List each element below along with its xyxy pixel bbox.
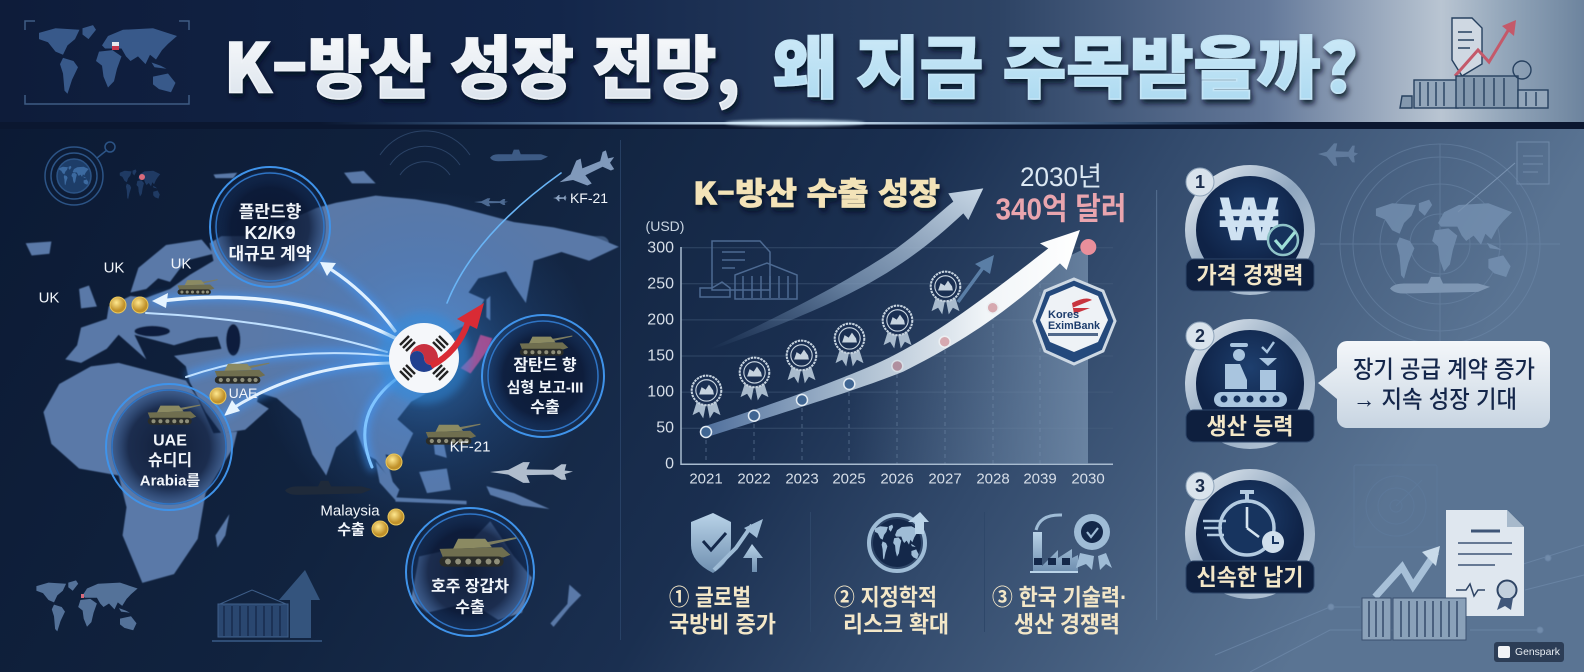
arrow: red growth xyxy=(431,303,484,366)
icon: fighter jet top right xyxy=(554,146,620,195)
arrow to Middle East 2 xyxy=(230,363,391,410)
circle: Australia: 수출 xyxy=(455,598,485,616)
circle: Poland: 플란드향 xyxy=(239,202,302,222)
strength 3: delivery xyxy=(1185,469,1315,599)
arrow to Middle East 1 xyxy=(186,353,389,377)
x axis labels: 2026 xyxy=(880,470,914,488)
data points xyxy=(700,239,1096,438)
y axis labels: 250 xyxy=(647,276,674,292)
panel divider xyxy=(620,140,621,640)
circle: UAE Saudi: UAE xyxy=(153,432,187,450)
circle: Australia: 호주 장갑차 xyxy=(431,578,509,596)
label: KF-21 top: KF-21 xyxy=(570,190,608,206)
circle: UAE Saudi: Arabia를 xyxy=(140,472,200,490)
title: K–방산 성장 전망, xyxy=(224,14,740,112)
icon: small map bottom left xyxy=(36,580,138,631)
panel: growth chart xyxy=(646,162,1126,488)
circle: Poland xyxy=(210,167,330,287)
panel divider xyxy=(1156,190,1157,620)
Genspark mark: Genspark xyxy=(1515,646,1561,658)
icon: globe with arrow xyxy=(869,512,929,571)
icon: won with check: ₩ xyxy=(1220,186,1279,254)
header band xyxy=(0,0,1584,129)
item: Korean technology xyxy=(992,514,1127,637)
map labels: UAE xyxy=(229,385,257,401)
main growth arrow xyxy=(703,230,1080,437)
y axis labels: 150 xyxy=(647,348,674,364)
map labels: KF-21 xyxy=(450,438,490,456)
circle: UAE Saudi xyxy=(106,384,232,510)
callout: long term contracts: → 지속 성장 기대 xyxy=(1353,386,1517,414)
arrowheads xyxy=(152,262,336,416)
circle: Japan side: 심형 보고-III xyxy=(507,380,583,396)
icon: small jet xyxy=(474,198,508,206)
number badge: 1 xyxy=(1195,172,1205,192)
artillery near Philippines xyxy=(426,424,480,445)
icon: factory with seal xyxy=(1030,514,1112,573)
icon: growth arrow and containers xyxy=(1362,546,1466,640)
strength 2: production xyxy=(1185,319,1315,449)
radar arcs xyxy=(380,131,470,175)
icon: shield with arrow xyxy=(691,513,763,573)
flag glow over map xyxy=(254,188,594,528)
icon: tiny jet near label xyxy=(553,195,567,201)
text: ② 지정학적 xyxy=(834,584,937,610)
circle: Japan side: 수출 xyxy=(530,398,560,416)
icon: globe target xyxy=(45,142,115,205)
map labels: UK xyxy=(39,290,59,306)
chart heading: K–방산 수출 성장 xyxy=(693,168,940,214)
arrow to Poland xyxy=(324,265,395,331)
item: global defense spending xyxy=(669,513,776,637)
number badge: 3 xyxy=(1195,476,1205,496)
item divider xyxy=(810,512,811,632)
item: Korean technology: 생산 경쟁력 xyxy=(1014,611,1120,637)
badge: Korea Exim Bank xyxy=(1034,279,1115,364)
number badge: 2 xyxy=(1195,326,1205,346)
text: ① 글로벌 xyxy=(669,584,751,610)
x axis labels: 2039 xyxy=(1023,470,1057,488)
y axis labels xyxy=(647,240,674,472)
icon: contract document xyxy=(1446,510,1524,616)
item: global defense spending: 국방비 증가 xyxy=(669,611,776,637)
map labels: Malaysia xyxy=(320,502,380,520)
x axis labels: 2027 xyxy=(928,470,962,488)
icon: submarine top xyxy=(490,150,548,161)
icon: small map top left xyxy=(120,169,160,199)
arrow to jet xyxy=(447,173,561,303)
label pill: 생산 능력 xyxy=(1206,413,1294,439)
y axis labels: 200 xyxy=(647,312,674,328)
icon: export container with arrow xyxy=(212,570,322,642)
arrow to Europe xyxy=(160,297,395,338)
axis and grid xyxy=(681,247,1113,464)
icon: submarine south xyxy=(285,481,372,495)
small trend arrow xyxy=(958,255,994,302)
map labels: UK xyxy=(171,256,191,272)
circle: UAE Saudi: 슈디디 xyxy=(148,452,192,470)
2030 label: 2030년 xyxy=(1020,162,1102,192)
world map continents xyxy=(26,171,619,627)
y axis labels: 300 xyxy=(647,240,674,256)
medals xyxy=(692,272,960,418)
badge: Korea Exim Bank: EximBank xyxy=(1048,320,1101,332)
arrow glow xyxy=(154,262,395,467)
x axis labels: 2022 xyxy=(737,470,771,488)
callout: long term contracts: 장기 공급 계약 증가 xyxy=(1353,356,1535,384)
circle: Poland: K2/K9 xyxy=(244,223,296,243)
y axis labels: 50 xyxy=(656,420,674,436)
x axis labels xyxy=(689,470,1105,488)
x axis labels: 2023 xyxy=(785,470,819,488)
circle: Japan side xyxy=(482,315,604,437)
badge: Korea Exim Bank: Kores xyxy=(1048,309,1079,321)
callout: long term contracts xyxy=(1318,341,1550,428)
label pill: 가격 경쟁력 xyxy=(1196,262,1304,288)
arrow to Southeast Asia xyxy=(365,380,395,467)
icon: header contract, containers and growth arrow xyxy=(1400,18,1548,108)
icon: faded contract and bank xyxy=(700,241,797,299)
tank near UK xyxy=(178,279,218,295)
circle: Japan side: 잠탄드 향 xyxy=(513,356,577,374)
340 label: 340억 달러 xyxy=(996,192,1126,226)
icon: worker and conveyor xyxy=(1214,342,1287,407)
item divider xyxy=(984,512,985,632)
map labels xyxy=(39,256,490,538)
x axis labels: 2030 xyxy=(1071,470,1105,488)
item: geopolitical risk: 리스크 확대 xyxy=(843,611,949,637)
circle: Australia xyxy=(406,508,534,636)
map labels: UK xyxy=(104,260,124,276)
icon: header world map frame xyxy=(25,21,189,104)
title xyxy=(224,14,1358,112)
title: 왜 지금 주목받을까? xyxy=(773,14,1358,112)
tank above UAE xyxy=(215,363,269,384)
export arrows xyxy=(146,173,561,467)
icon: Korea flag xyxy=(378,312,470,404)
icon: stopwatch xyxy=(1203,490,1284,555)
x axis labels: 2021 xyxy=(689,470,723,488)
strength 1: price xyxy=(1185,165,1315,295)
y axis labels: 100 xyxy=(647,384,674,400)
area under curve xyxy=(850,247,1088,464)
item: geopolitical risk xyxy=(834,512,949,637)
x axis labels: 2028 xyxy=(976,470,1010,488)
map labels: 수출 xyxy=(337,522,365,538)
thin arrow to Europe xyxy=(146,313,387,352)
Genspark mark xyxy=(1494,642,1564,662)
panel: strengths background art xyxy=(1215,142,1584,672)
panel: export map xyxy=(26,131,620,642)
icon: fighter jet south xyxy=(490,462,573,483)
unit label: (USD) xyxy=(646,218,684,234)
text: ③ 한국 기술력· xyxy=(992,584,1127,610)
coins xyxy=(110,297,404,537)
circle: Poland: 대규모 계약 xyxy=(229,244,312,264)
upper trend arrow xyxy=(710,188,983,350)
label pill: 신속한 납기 xyxy=(1196,564,1304,590)
japan highlight xyxy=(461,335,492,373)
x axis labels: 2025 xyxy=(832,470,866,488)
y axis labels: 0 xyxy=(665,456,674,472)
